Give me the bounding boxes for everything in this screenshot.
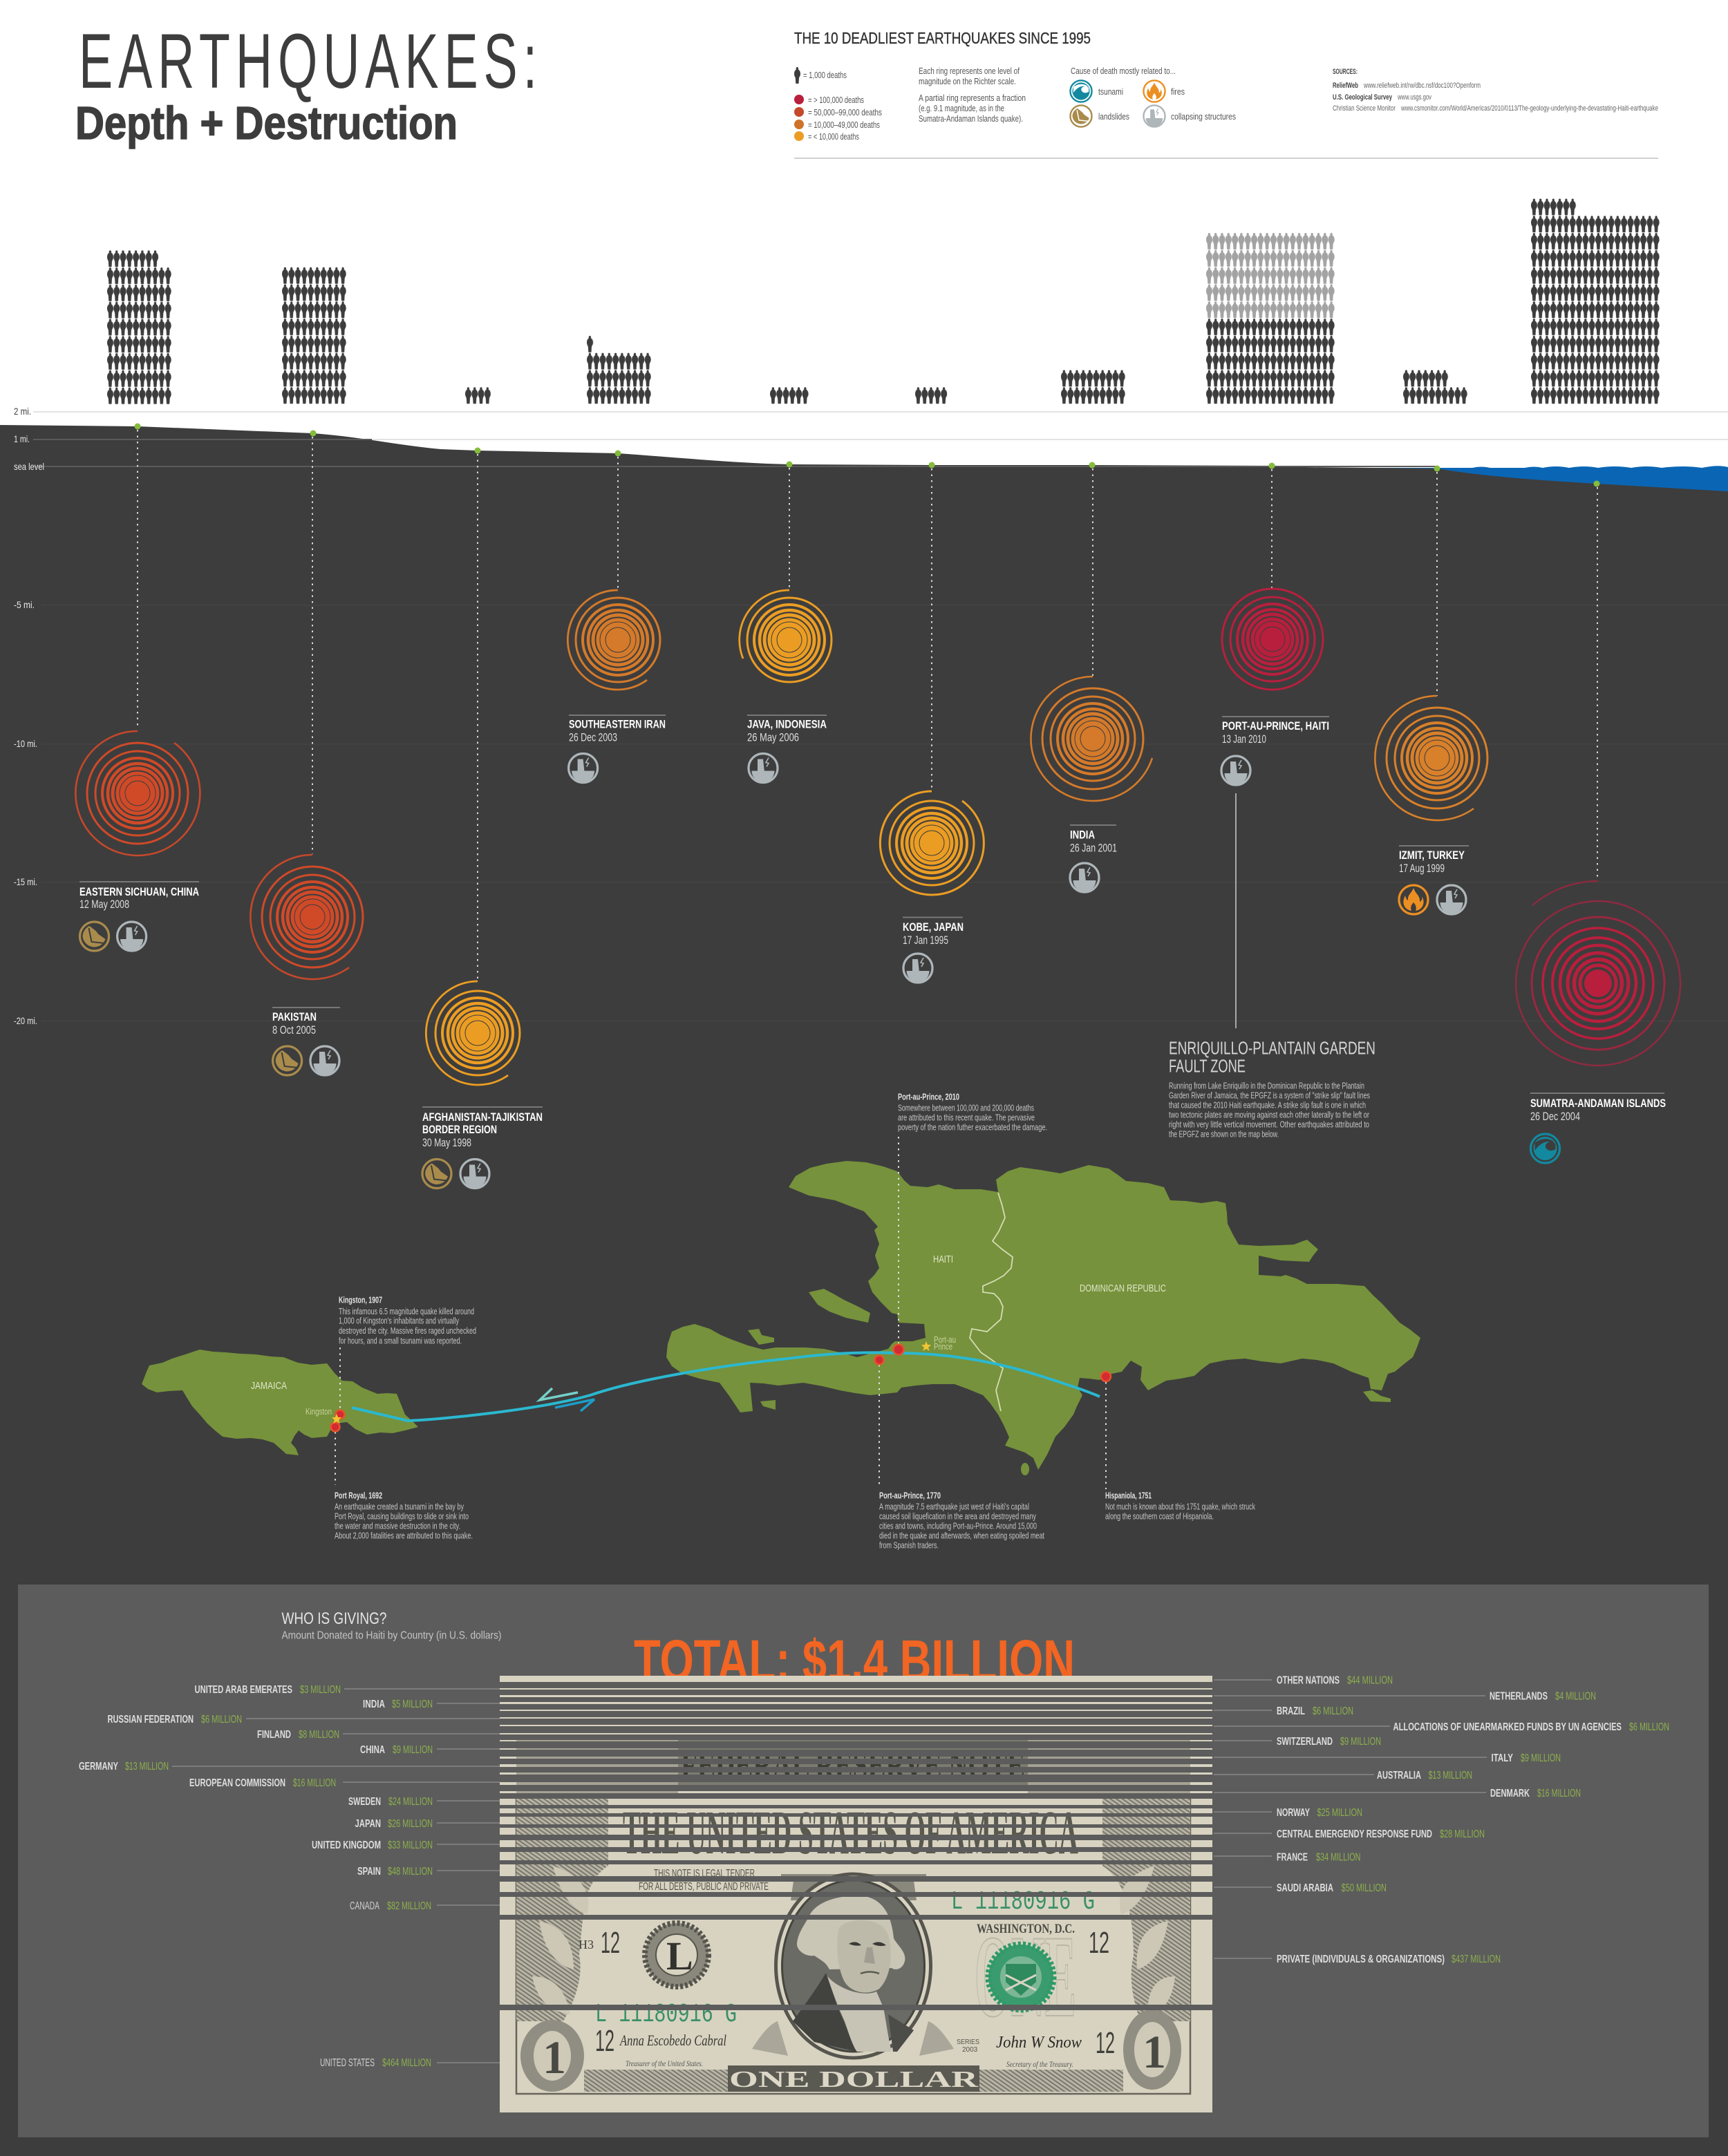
donors: left column: EUROPEAN COMMISSION xyxy=(189,1777,285,1789)
donors: left column: $6 MILLION xyxy=(201,1714,242,1725)
legend xyxy=(794,29,1658,142)
bill: federal reserve seal xyxy=(645,1923,708,1987)
legend: colour key: = < 10,000 deaths xyxy=(808,131,859,142)
map note: Hispaniola, 1751: Not much is known about this 1751 quake, which struck xyxy=(1105,1501,1255,1512)
donors: left column: $464 MILLION xyxy=(382,2057,431,2069)
map: Hispaniola xyxy=(666,1161,1420,1470)
pictogram: Izmit xyxy=(1403,370,1467,404)
quake: Southeastern Iran xyxy=(567,590,666,782)
map note: Port-au-Prince, 2010: are attributed to this recent quake. The pervasive xyxy=(898,1113,1035,1122)
legend: cause of death key: Cause of death mostly related to... xyxy=(1071,66,1176,76)
fault zone body: that caused the 2010 Haiti earthquake. A strike slip fault is one in which xyxy=(1169,1100,1366,1110)
total headline: TOTAL: $1.4 BILLION xyxy=(634,1628,1075,1693)
label: 26 Dec 2003 xyxy=(569,731,617,744)
map: strike-slip arrow left xyxy=(540,1388,578,1400)
map note: Port Royal, 1692: An earthquake created a tsunami in the bay by xyxy=(335,1501,464,1512)
cause icon xyxy=(903,954,932,983)
bill: lower ornament and ONE DOLLAR xyxy=(584,2065,1123,2092)
map: strike-slip arrow right xyxy=(555,1399,594,1411)
legend: sources: Christian Science Monitor xyxy=(1333,104,1396,113)
donors: left column: $9 MILLION xyxy=(393,1744,433,1756)
map note: Port Royal, 1692: Port Royal, 1692 xyxy=(335,1490,382,1501)
map note: Port Royal, 1692 xyxy=(335,1490,473,1541)
map note: Port-au-Prince, 2010: Port-au-Prince, 2010 xyxy=(898,1092,959,1101)
map note: Port-au-Prince, 1770: caused soil liquefication in the area and destroyed many xyxy=(879,1511,1036,1522)
donors: right column xyxy=(1277,1675,1669,1965)
donors: right column: $25 MILLION xyxy=(1317,1807,1362,1819)
donors: right column: DENMARK xyxy=(1490,1788,1530,1799)
rings xyxy=(1516,881,1680,1066)
bill: portrait of Washington xyxy=(793,1896,914,2052)
donors: right column: OTHER NATIONS xyxy=(1277,1675,1340,1686)
label: SUMATRA-ANDAMAN ISLANDS xyxy=(1530,1097,1666,1110)
donors: right column: $34 MILLION xyxy=(1316,1852,1360,1863)
donors: right column: SWITZERLAND xyxy=(1277,1736,1333,1748)
map: offshore islands xyxy=(748,1289,1391,1475)
donation leader lines xyxy=(172,1680,1487,2063)
map note: Port-au-Prince, 1770 xyxy=(879,1490,1044,1551)
donors: right column: BRAZIL xyxy=(1277,1705,1305,1717)
bill: serial numbers: L 11180916 G xyxy=(595,2000,737,2030)
bill: donation stripes cut through the note xyxy=(500,1682,1212,2010)
label: AFGHANISTAN-TAJIKISTAN xyxy=(422,1110,543,1124)
donors: left column: $24 MILLION xyxy=(388,1796,433,1808)
rings xyxy=(75,731,200,855)
map note: Port-au-Prince, 2010 xyxy=(898,1092,1047,1132)
donors: right column: $6 MILLION xyxy=(1313,1705,1353,1717)
rings xyxy=(250,855,363,979)
donors: right column: PRIVATE (INDIVIDUALS & ORGANIZATIONS) xyxy=(1277,1954,1445,1965)
quake: Java xyxy=(740,590,832,782)
label: KOBE, JAPAN xyxy=(903,920,964,934)
quake: Izmit xyxy=(1375,696,1487,914)
fault zone heading: ENRIQUILLO-PLANTAIN GARDEN xyxy=(1169,1038,1375,1059)
legend: ring explanation: A partial ring represents a fraction xyxy=(919,93,1026,103)
legend: cause of death key: collapsing structures xyxy=(1171,111,1236,122)
bill: title lettering: THE UNITED STATES OF AMERICA xyxy=(623,1799,1078,1867)
legend: colour key xyxy=(794,95,882,142)
cause icons xyxy=(80,922,147,951)
bill: left column ornament xyxy=(516,1797,608,2021)
donors: right column: SAUDI ARABIA xyxy=(1277,1882,1333,1894)
rings xyxy=(1375,696,1487,820)
depth scale labels: sea level xyxy=(14,461,44,472)
bill: signatures: Secretary of the Treasury. xyxy=(1006,2059,1073,2069)
bill: portrait frame xyxy=(752,1874,954,2058)
depth scale labels: -15 mi. xyxy=(14,876,37,887)
donations heading: WHO IS GIVING? xyxy=(282,1609,387,1628)
map note: Hispaniola, 1751: Hispaniola, 1751 xyxy=(1105,1490,1152,1501)
legend: cause of death key: fires xyxy=(1171,86,1185,97)
donors: left column: $33 MILLION xyxy=(388,1840,433,1851)
bill: signatures: Treasurer of the United States. xyxy=(626,2059,703,2068)
legend: sources: www.usgs.gov xyxy=(1397,93,1431,102)
label xyxy=(272,1007,340,1037)
bill: signatures: SERIES xyxy=(957,2039,979,2046)
label: 17 Jan 1995 xyxy=(903,934,948,947)
label: 26 Jan 2001 xyxy=(1070,842,1117,854)
bill: legal tender text: FOR ALL DEBTS, PUBLIC AND PRIVATE xyxy=(639,1881,769,1893)
cause icons xyxy=(1399,885,1466,914)
legend: sources: ReliefWeb xyxy=(1333,82,1358,90)
donors: left column: $8 MILLION xyxy=(299,1729,339,1741)
label: 30 May 1998 xyxy=(422,1136,471,1149)
bill: federal reserve seal: L xyxy=(666,1933,693,1978)
depth scale labels: -5 mi. xyxy=(14,599,35,610)
label: 17 Aug 1999 xyxy=(1399,862,1445,875)
pictogram: Pakistan xyxy=(282,267,346,404)
donors: right column: $13 MILLION xyxy=(1429,1770,1472,1781)
legend: pictogram key xyxy=(794,67,847,84)
fault zone heading xyxy=(1169,1038,1375,1077)
legend heading: THE 10 DEADLIEST EARTHQUAKES SINCE 1995 xyxy=(794,29,1091,47)
label: PORT-AU-PRINCE, HAITI xyxy=(1222,719,1329,732)
fault zone heading: FAULT ZONE xyxy=(1169,1056,1246,1077)
pictogram: Afghanistan-Tajikistan xyxy=(465,387,491,404)
rings xyxy=(1031,677,1152,801)
bill: legal tender text xyxy=(639,1868,769,1893)
legend: cause of death key: tsunami xyxy=(1098,86,1123,97)
label: 12 May 2008 xyxy=(79,898,129,911)
subtitle: Depth + Destruction xyxy=(75,97,458,149)
bill: frame xyxy=(516,1797,1190,2094)
bill: legal tender text: THIS NOTE IS LEGAL TENDER xyxy=(654,1868,755,1880)
label: 13 Jan 2010 xyxy=(1222,732,1266,746)
dotted depth lines xyxy=(138,430,1597,981)
donors: left column xyxy=(79,1684,433,2069)
bill: Washington D.C.: WASHINGTON, D.C. xyxy=(977,1922,1075,1936)
map: capital stars xyxy=(332,1341,931,1424)
donors: left column: $82 MILLION xyxy=(387,1900,431,1912)
map note: Kingston, 1907 xyxy=(339,1295,476,1346)
cause icon xyxy=(1221,756,1250,785)
donors: right column: NETHERLANDS xyxy=(1490,1690,1548,1703)
cause icons xyxy=(273,1046,339,1075)
map of Jamaica and Hispaniola xyxy=(142,1137,1420,1489)
quake: Kobe xyxy=(880,791,984,983)
label xyxy=(422,1106,543,1149)
bill: signatures: Anna Escobedo Cabral xyxy=(619,2032,726,2049)
map note: Port Royal, 1692: About 2,000 fatalities are attributed to this quake. xyxy=(335,1530,473,1541)
map note: Port Royal, 1692: the water and massive destruction in the city. xyxy=(335,1520,460,1531)
map note: Port-au-Prince, 1770: cities and towns, including Port-au-Prince. Around 15,000 xyxy=(879,1520,1037,1531)
donors: left column: CHINA xyxy=(360,1744,385,1756)
donors: right column: AUSTRALIA xyxy=(1377,1770,1421,1781)
map: labels xyxy=(251,1254,1166,1417)
bill: serial numbers xyxy=(595,1887,1095,2030)
bill: plate numbers: 12 xyxy=(601,1926,620,1960)
cause icon xyxy=(569,753,598,782)
bill: right column ornament xyxy=(1102,1797,1190,2021)
bill: plate numbers: H3 xyxy=(579,1938,594,1951)
label xyxy=(1399,845,1469,875)
donors: right column: $16 MILLION xyxy=(1537,1788,1581,1799)
donors: right column: NORWAY xyxy=(1277,1807,1310,1819)
map note: Port-au-Prince, 1770: from Spanish traders. xyxy=(879,1540,939,1551)
dollar bill xyxy=(500,1676,1212,2112)
map note: Hispaniola, 1751 xyxy=(1105,1490,1255,1522)
donors: right column: $6 MILLION xyxy=(1629,1721,1669,1733)
depth scale labels: -10 mi. xyxy=(14,738,37,749)
depth scale labels: 2 mi. xyxy=(14,406,31,417)
donors: left column: $16 MILLION xyxy=(293,1777,336,1789)
bill: plate numbers: 12 xyxy=(1089,1926,1109,1960)
donors: left column: UNITED KINGDOM xyxy=(312,1840,381,1851)
grid lines above ground xyxy=(33,411,1728,440)
fault zone body xyxy=(1169,1081,1370,1139)
donors: left column: SWEDEN xyxy=(348,1796,381,1808)
donors: left column: JAPAN xyxy=(355,1818,381,1830)
map note: Port-au-Prince, 1770: Port-au-Prince, 1770 xyxy=(879,1490,941,1501)
legend: ring explanation: (e.g. 9.1 magnitude, as in the xyxy=(919,103,1004,113)
donors: left column: FINLAND xyxy=(257,1729,291,1741)
map: national border xyxy=(970,1193,1013,1411)
label xyxy=(903,916,964,947)
map: labels: Port-au xyxy=(934,1334,956,1345)
donors: right column: $50 MILLION xyxy=(1342,1882,1387,1894)
label xyxy=(747,715,827,744)
label xyxy=(79,881,199,911)
label: 26 Dec 2004 xyxy=(1530,1110,1580,1123)
bill: signatures: John W Snow xyxy=(996,2034,1082,2052)
donors: right column: $28 MILLION xyxy=(1440,1828,1485,1840)
donations heading: Amount Donated to Haiti by Country (in U.S. dollars) xyxy=(282,1629,502,1642)
map note: Port-au-Prince, 1770: died in the quake and afterwards, when eating spoiled meat xyxy=(879,1530,1044,1541)
legend: ring explanation: Each ring represents one level of xyxy=(919,66,1020,76)
depth scale labels: 1 mi. xyxy=(14,433,30,444)
map: labels: JAMAICA xyxy=(251,1380,287,1392)
rings xyxy=(1222,589,1323,690)
legend: cause of death key xyxy=(1070,66,1236,127)
map note: Kingston, 1907: This infamous 6.5 magnitude quake killed around xyxy=(339,1306,474,1316)
label: BORDER REGION xyxy=(422,1123,497,1136)
legend: colour key: = > 100,000 deaths xyxy=(808,95,864,105)
donors: left column: CANADA xyxy=(350,1900,379,1912)
cause icon xyxy=(1070,863,1099,892)
legend: colour key: = 50,000–99,000 deaths xyxy=(808,107,882,117)
map note: Kingston, 1907: destroyed the city. Massive fires raged unchecked xyxy=(339,1325,476,1336)
label: 26 May 2006 xyxy=(747,731,799,744)
label: PAKISTAN xyxy=(272,1010,317,1023)
map: labels: DOMINICAN REPUBLIC xyxy=(1080,1283,1166,1294)
bill: corner ones: 1 xyxy=(543,2031,566,2083)
quake: India xyxy=(1031,677,1152,892)
map note: Port-au-Prince, 2010: Somewhere between 100,000 and 200,000 deaths xyxy=(898,1103,1034,1113)
label: 8 Oct 2005 xyxy=(272,1023,316,1037)
donors: left column: UNITED ARAB EMERATES xyxy=(195,1684,292,1696)
label: SOUTHEASTERN IRAN xyxy=(569,717,666,731)
donors: right column: $44 MILLION xyxy=(1347,1675,1393,1686)
donors: left column: $48 MILLION xyxy=(388,1866,433,1878)
title: EARTHQUAKES: xyxy=(79,18,543,104)
donors: left column: RUSSIAN FEDERATION xyxy=(108,1714,194,1725)
pictogram: Port-au-Prince xyxy=(1206,233,1335,404)
panel: who is giving xyxy=(18,1585,1709,2137)
map note: Port-au-Prince, 2010: poverty of the nation futher exacerbated the damage. xyxy=(898,1122,1047,1132)
donors: left column: $26 MILLION xyxy=(388,1818,433,1830)
cause icons xyxy=(422,1160,489,1189)
rings xyxy=(880,791,984,895)
map: labels: HAITI xyxy=(933,1254,953,1265)
label: EASTERN SICHUAN, CHINA xyxy=(79,885,199,898)
map: Jamaica xyxy=(142,1350,418,1455)
fault zone body: Running from Lake Enriquillo in the Dominican Republic to the Plantain xyxy=(1169,1081,1364,1090)
quake: Sumatra-Andaman xyxy=(1516,881,1680,1163)
label: INDIA xyxy=(1070,828,1095,842)
donors: left column: SPAIN xyxy=(357,1866,381,1878)
depth grid lines xyxy=(33,439,1728,1021)
pictogram: India xyxy=(1061,370,1125,404)
legend: ring explanation: Sumatra-Andaman Islands quake). xyxy=(919,113,1023,124)
bill: paper xyxy=(500,1676,1212,2112)
map note: Kingston, 1907: Kingston, 1907 xyxy=(339,1295,382,1305)
bill: plate numbers: 12 xyxy=(1096,2026,1115,2060)
bill: plate numbers xyxy=(579,1926,1115,2060)
depth scale labels xyxy=(14,406,44,1026)
map note: Hispaniola, 1751: along the southern coast of Hispaniola. xyxy=(1105,1511,1214,1522)
pictogram: Southeastern Iran xyxy=(587,336,651,404)
donors: right column: ITALY xyxy=(1492,1752,1513,1764)
pictogram: Eastern Sichuan xyxy=(107,250,171,404)
fault zone explainer xyxy=(1169,1038,1375,1139)
bill: signatures: 2003 xyxy=(962,2046,978,2054)
fault zone body: right with very little vertical movement. Other earthquakes attributed to xyxy=(1169,1119,1369,1129)
map note: Kingston, 1907: for hours, and a small tsunami was reported. xyxy=(339,1335,462,1346)
donations heading xyxy=(282,1609,502,1642)
quake: Pakistan xyxy=(250,855,363,1075)
map note: Kingston, 1907: 1,000 of Kingston's inhabitants and virtually xyxy=(339,1316,459,1325)
pictogram: Kobe xyxy=(915,387,947,404)
label: IZMIT, TURKEY xyxy=(1399,849,1465,862)
depth scale labels: -20 mi. xyxy=(14,1015,37,1026)
map note: Port Royal, 1692: Port Royal, causing buildings to slide or sink into xyxy=(335,1511,469,1522)
legend: ring explanation: magnitude on the Richter scale. xyxy=(919,76,1016,86)
donors: left column: $5 MILLION xyxy=(392,1699,433,1710)
cause icon xyxy=(1530,1134,1559,1163)
donors: right column: $437 MILLION xyxy=(1452,1954,1501,1965)
map: labels: Kingston xyxy=(306,1406,332,1417)
label: JAVA, INDONESIA xyxy=(747,717,827,731)
label xyxy=(1530,1093,1666,1123)
donors: right column: FRANCE xyxy=(1277,1852,1308,1863)
legend: cause of death key: landslides xyxy=(1098,111,1129,122)
label xyxy=(1222,716,1329,746)
legend: sources: U.S. Geological Survey xyxy=(1333,93,1393,102)
water xyxy=(1299,466,1728,494)
bill: plate numbers: 12 xyxy=(595,2024,614,2058)
map: fault line xyxy=(352,1352,1100,1421)
donors: left column: $13 MILLION xyxy=(125,1761,169,1772)
fault zone body: the EPGFZ are shown on the map below. xyxy=(1169,1129,1279,1139)
quake: Eastern Sichuan xyxy=(75,731,200,951)
rings xyxy=(740,590,832,682)
rings xyxy=(426,981,520,1085)
bill: upper ornamental bands xyxy=(516,1738,1190,1799)
donors: right column: ALLOCATIONS OF UNEARMARKED FUNDS BY UN AGENCIES xyxy=(1393,1721,1622,1733)
pictogram: Java xyxy=(770,387,809,404)
donors: right column: CENTRAL EMERGENDY RESPONSE FUND xyxy=(1277,1828,1432,1840)
pictogram: Sumatra-Andaman xyxy=(1531,198,1660,404)
map: labels: Prince xyxy=(934,1341,952,1352)
bill: corner ones xyxy=(520,2010,1181,2092)
map: dotted callout lines xyxy=(335,1137,1106,1489)
donors: right column: $9 MILLION xyxy=(1521,1752,1561,1764)
quake: Port-au-Prince xyxy=(1221,589,1329,785)
fault zone body: Garden River of Jamaica, the EPGFZ is a system of "strike slip" fault lines xyxy=(1169,1090,1370,1100)
legend: sources xyxy=(1333,68,1658,113)
donors: left column: UNITED STATES xyxy=(320,2057,375,2069)
donors: left column: INDIA xyxy=(363,1699,385,1710)
fault zone connector line xyxy=(1235,793,1237,1028)
bill: upper ornamental bands: FEDERAL RESERVE NOTE xyxy=(681,1742,1025,1789)
bill: signatures xyxy=(619,2032,1082,2069)
rings xyxy=(567,590,660,690)
donors: right column: $4 MILLION xyxy=(1555,1690,1596,1703)
label xyxy=(569,715,666,744)
bill: serial numbers: L 11180916 G xyxy=(951,1887,1095,1917)
pictogram chart: deaths per quake xyxy=(107,198,1660,404)
map note: Port-au-Prince, 1770: A magnitude 7.5 earthquake just west of Haiti's capital xyxy=(879,1501,1029,1512)
donors: left column: $3 MILLION xyxy=(300,1684,341,1696)
map: quake markers xyxy=(330,1345,1111,1432)
legend: sources: www.reliefweb.int/rw/dbc.nsf/doc100?Openform xyxy=(1363,82,1481,90)
bill: treasury seal and ONE xyxy=(975,1911,1076,2041)
bill: corner ones: 1 xyxy=(1143,2025,1166,2078)
legend: pictogram key: = 1,000 deaths xyxy=(803,70,847,80)
quake: Afghanistan-Tajikistan xyxy=(422,981,543,1189)
cause icon xyxy=(749,753,778,782)
fault zone body: two tectonic plates are moving against each other laterally to the left or xyxy=(1169,1110,1369,1119)
bill: lower ornament and ONE DOLLAR: ONE DOLLAR xyxy=(729,2067,979,2092)
dollar bill: ONE xyxy=(975,1911,1076,2041)
epicentre surface markers xyxy=(134,423,1599,486)
label xyxy=(1070,824,1117,854)
donors: left column: GERMANY xyxy=(79,1761,118,1772)
legend: colour key: = 10,000–49,000 deaths xyxy=(808,120,880,130)
donors: right column: $9 MILLION xyxy=(1340,1736,1381,1748)
legend: ring explanation xyxy=(919,66,1026,124)
legend: sources: SOURCES: xyxy=(1333,68,1358,76)
